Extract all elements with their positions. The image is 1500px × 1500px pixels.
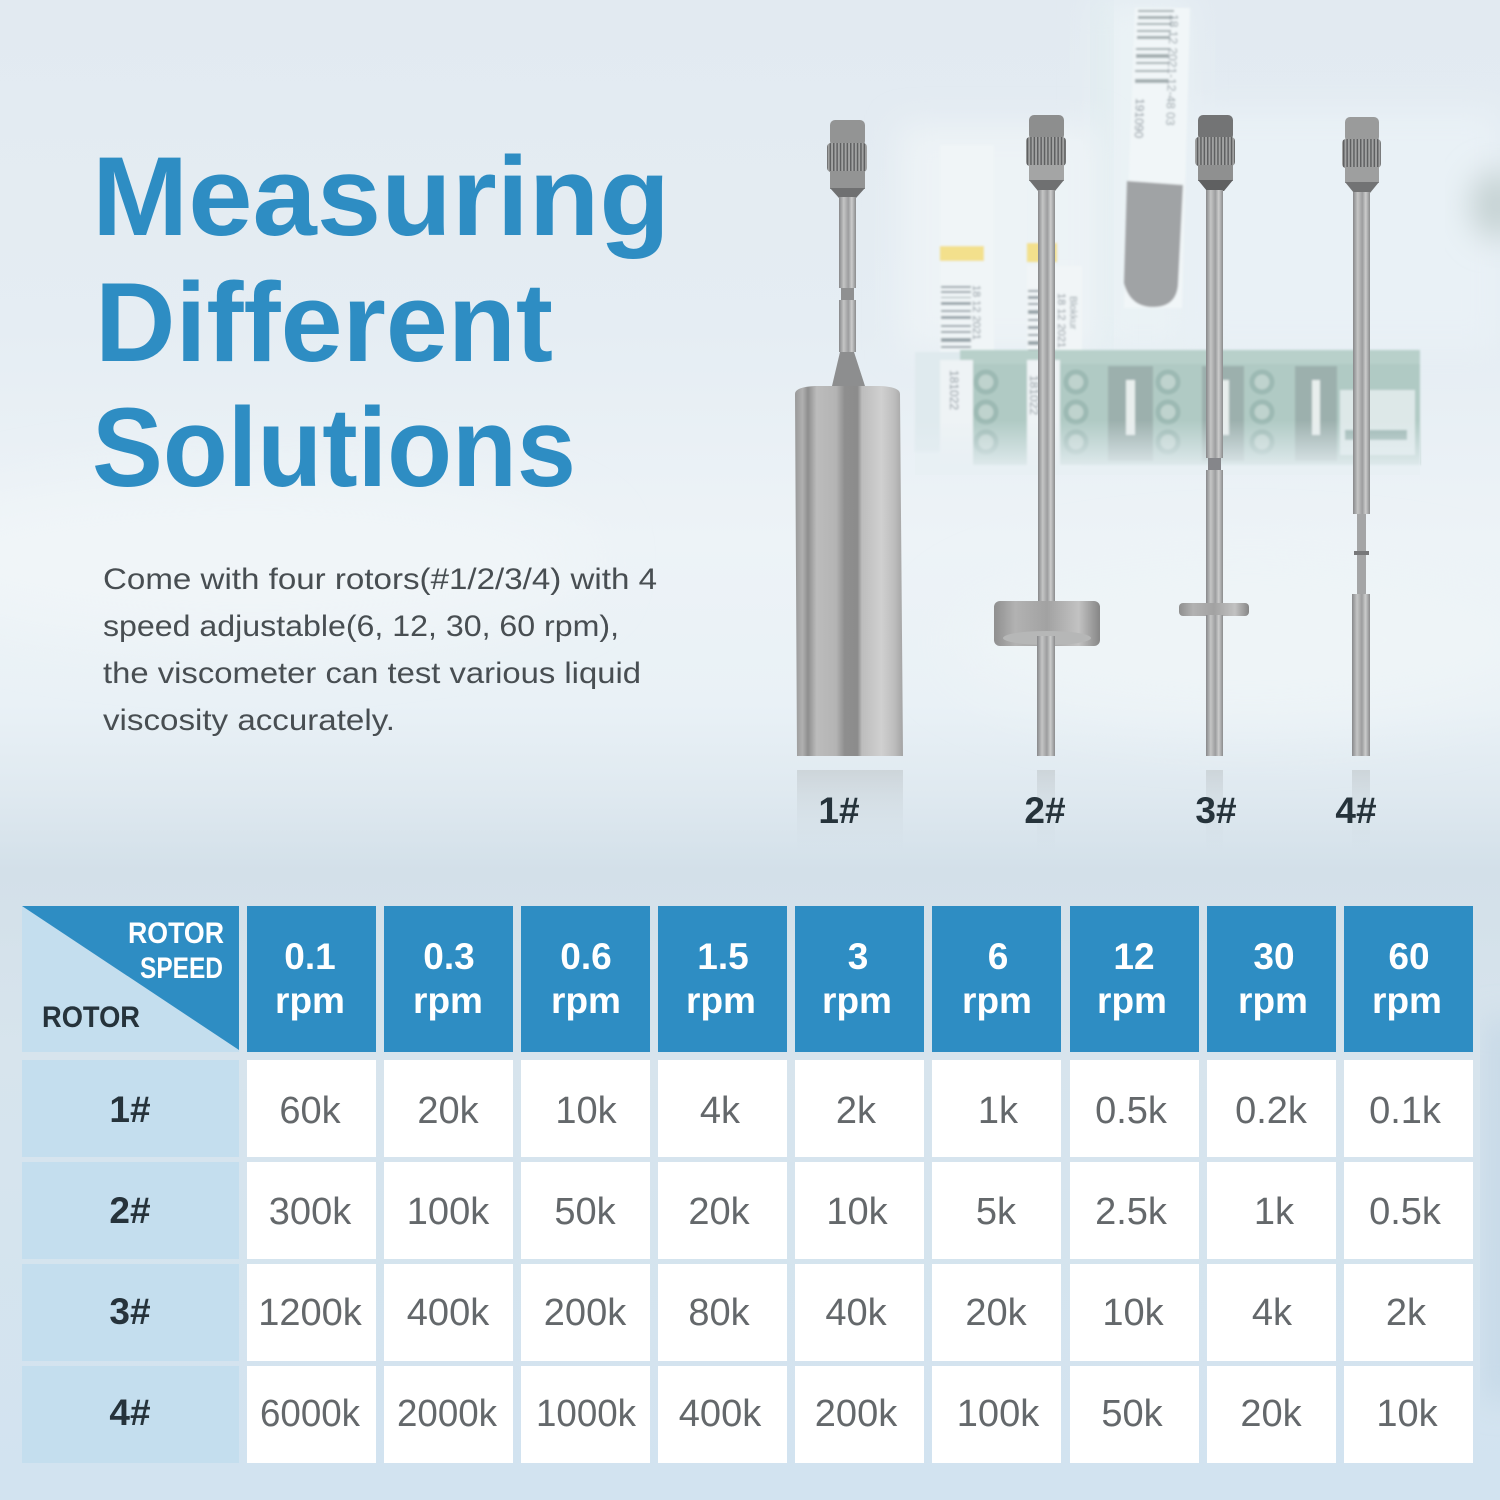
data cells: 20k [688,1191,751,1233]
title [92,134,670,510]
data cells: 10k [826,1191,889,1233]
rotor labels: 4# [1335,790,1377,831]
data cells: 6000k [260,1393,361,1435]
data cells: 400k [679,1393,762,1435]
data cells: 4k [1252,1292,1293,1334]
table corner header [22,906,239,1052]
data cells: 80k [688,1292,751,1334]
description text: Come with four rotors(#1/2/3/4) with 4 [103,563,657,596]
speed column headers: 6 [988,936,1008,977]
rotor row headers: 1# [109,1089,151,1130]
data cells: 0.5k [1095,1090,1168,1132]
rotor 4# [1342,117,1381,860]
data cells: 40k [825,1292,888,1334]
data cells: 2.5k [1095,1191,1168,1233]
data cells: 50k [554,1191,617,1233]
data cells: 0.5k [1369,1191,1442,1233]
title: Different [95,260,553,385]
rotor 3# [1179,115,1249,860]
data cells: 100k [407,1191,490,1233]
data cells: 1k [1254,1191,1295,1233]
speed column headers: rpm [275,980,345,1021]
data cells: 5k [976,1191,1017,1233]
speed column headers: rpm [686,980,756,1021]
speed column headers [247,906,1473,1052]
data cells: 0.1k [1369,1090,1442,1132]
rotor 2# [994,115,1100,860]
tube rack [915,350,1420,465]
speed column headers: 0.1 [284,936,336,977]
table [22,906,1473,1463]
rotor row headers: 3# [109,1291,151,1332]
description text: speed adjustable(6, 12, 30, 60 rpm), [103,610,619,643]
data cells: 2k [836,1090,877,1132]
data cells: 1k [978,1090,1019,1132]
table corner header: SPEED [140,952,223,985]
speed column headers: 0.3 [423,936,475,977]
sample tubes: 18 12 2021 [1055,293,1067,348]
test tube with barcode [1124,8,1190,308]
data cells: 20k [965,1292,1028,1334]
speed column headers: 30 [1253,936,1295,977]
speed column headers: rpm [1372,980,1442,1021]
data cells: 10k [555,1090,618,1132]
speed column headers: 1.5 [697,936,749,977]
data cells: 300k [269,1191,352,1233]
speed column headers: rpm [1097,980,1167,1021]
rotor row headers: 4# [109,1392,151,1433]
title: Solutions [92,385,576,510]
data cells: 2000k [397,1393,498,1435]
test tube with barcode: 191090 [1132,98,1147,139]
rotor labels [818,790,1377,831]
speed column headers: rpm [822,980,892,1021]
table corner header: ROTOR [128,917,224,950]
sample tubes: Blokkur [1067,296,1078,330]
data cells: 20k [1240,1393,1303,1435]
data cells [247,1060,1473,1463]
data cells: 1200k [258,1292,363,1334]
speed column headers: 12 [1113,936,1155,977]
title: Measuring [92,134,670,259]
data cells: 1000k [536,1393,637,1435]
table corner header: ROTOR [42,1001,140,1034]
data cells: 0.2k [1235,1090,1308,1132]
rotor row headers: 2# [109,1190,151,1231]
tube rack: 181022 [1027,375,1041,415]
data cells: 10k [1376,1393,1439,1435]
speed column headers: rpm [413,980,483,1021]
speed column headers: rpm [1238,980,1308,1021]
tube rack: 181022 [947,370,961,410]
test tube with barcode: 18 12 2021-12-48 03 [1163,14,1181,126]
rotor labels: 2# [1024,790,1066,831]
description text: the viscometer can test various liquid [103,657,641,690]
speed column headers: 60 [1388,936,1430,977]
data cells: 4k [700,1090,741,1132]
data cells: 50k [1101,1393,1164,1435]
data cells: 400k [407,1292,490,1334]
data cells: 60k [279,1090,342,1132]
description text [103,563,657,737]
rotor row headers [22,1060,239,1463]
speed column headers: 3 [848,936,868,977]
speed column headers: 0.6 [560,936,612,977]
data cells: 100k [957,1393,1040,1435]
data cells: 200k [544,1292,627,1334]
sample tubes [940,140,1082,466]
data cells: 10k [1102,1292,1165,1334]
sample tubes: 18 12 2021 [970,285,982,340]
speed column headers: rpm [962,980,1032,1021]
speed column headers: rpm [551,980,621,1021]
data cells: 2k [1386,1292,1427,1334]
description text: viscosity accurately. [103,704,395,737]
data cells: 200k [815,1393,898,1435]
data cells: 20k [417,1090,480,1132]
rotor labels: 3# [1195,790,1237,831]
rotor labels: 1# [818,790,860,831]
rotor 1# [795,120,903,860]
